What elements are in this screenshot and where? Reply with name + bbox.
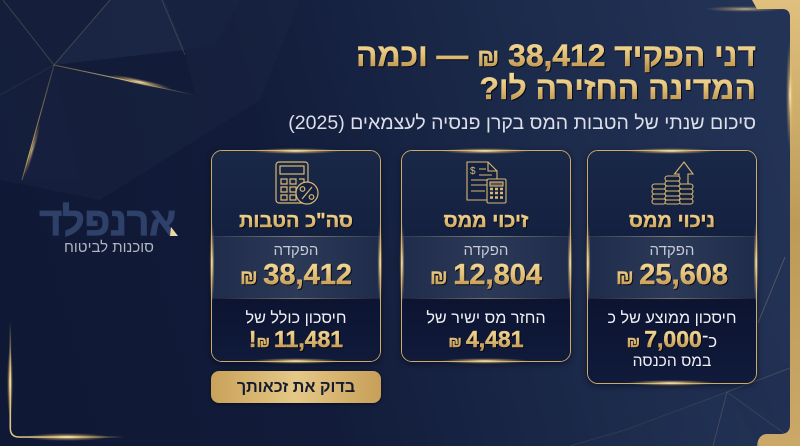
savings text: חיסכון ממוצע של כ [608,309,736,327]
icon: document and calculator: $ [470,166,476,177]
savings amount: כ־7,000 ₪ [627,326,717,352]
title line 1: דני הפקיד 38,412 ₪ — וכמה [356,37,756,73]
deposit amount [402,257,570,293]
icon: calculator with percent [275,161,319,205]
logo tagline: סוכנות לביטוח [64,239,154,256]
savings note: במס הכנסה [633,353,711,370]
card heading [402,207,570,235]
deposit amount: 12,804 ₪ [430,259,542,291]
card heading [588,207,756,235]
deposit label: הפקדה [464,242,508,259]
deposit amount: 38,412 ₪ [240,259,352,291]
panel: tax credit card [401,150,571,362]
card heading: ניכוי ממס [629,210,715,232]
title line 2 [296,69,756,107]
refund amount: 4,481 ₪ [448,326,524,352]
button: check eligibility: בדוק את זכאותך [237,378,355,396]
title line 2: המדינה החזירה לו? [479,70,756,106]
deposit amount: 25,608 ₪ [616,259,728,291]
refund amount [402,325,570,353]
deposit amount [588,257,756,293]
panel: total benefits card [211,150,381,362]
total savings amount: 11,481 ₪! [249,326,343,352]
title [356,37,756,106]
refund text: החזר מס ישיר של [426,309,546,327]
subtitle: סיכום שנתי של הטבות המס בקרן פנסיה לעצמאים (2025) [288,112,756,134]
logo gold triangle [170,227,178,236]
total savings amount [212,325,380,353]
logo wordmark: ארנפלד [39,200,176,244]
deposit label: הפקדה [274,242,318,259]
deposit amount [212,257,380,293]
card heading: סה"כ הטבות [239,210,353,232]
button: check eligibility [211,371,381,403]
icon: document and calculator [466,162,507,204]
deposit label: הפקדה [650,242,694,259]
card heading [212,207,380,235]
logo [39,200,178,256]
total savings text: חיסכון כולל של [246,309,346,327]
icon: coin stacks with arrow [652,161,694,204]
panel: tax deduction card [587,150,757,384]
card heading: זיכוי ממס [444,210,528,232]
